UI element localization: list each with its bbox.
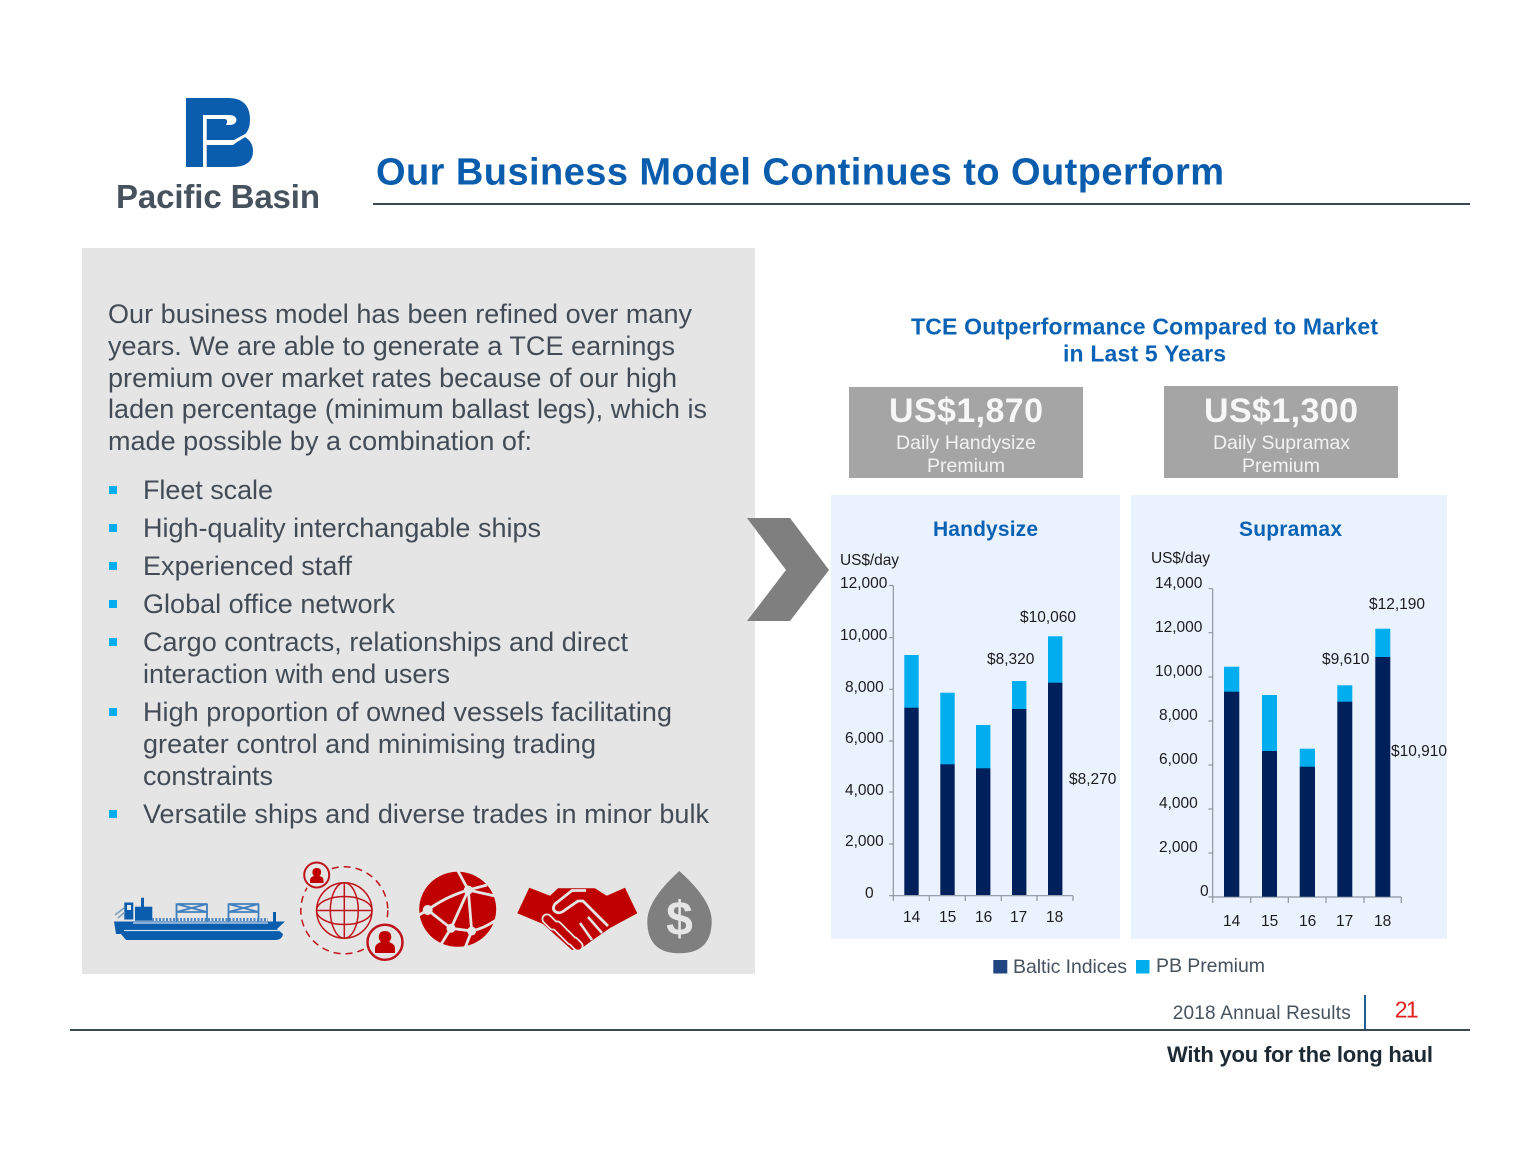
text block: introduction: premium over market rates because of our high	[108, 363, 677, 393]
value labels: Supramax: $9,610	[1322, 651, 1370, 668]
arrow: chevron	[747, 518, 829, 621]
axis labels: Supramax: 10,000	[1155, 663, 1203, 680]
bullet list: constraints	[143, 761, 273, 791]
text block: introduction	[108, 299, 707, 456]
axis labels: Handysize: 0	[865, 885, 874, 902]
logo: Pacific Basin: Pacific Basin	[116, 178, 320, 215]
axis labels: Handysize: 2,000	[845, 833, 884, 850]
heading: Supramax: Supramax	[1239, 518, 1342, 541]
heading: TCE outperformance: TCE Outperformance Compared to Market	[911, 314, 1378, 340]
text block: introduction: Our business model has been refined over many	[108, 299, 692, 329]
callout: Handysize premium: US$1,870	[889, 392, 1043, 430]
axis labels: Handysize: 18	[1046, 909, 1063, 926]
footer: 21	[1395, 997, 1419, 1023]
axis labels: Supramax: 8,000	[1159, 707, 1198, 724]
axis labels: Handysize: 8,000	[845, 679, 884, 696]
logo: Pacific Basin	[116, 98, 320, 215]
axis labels: Supramax: 14,000	[1155, 575, 1203, 592]
footer: With you for the long haul	[1167, 1042, 1433, 1067]
axis labels: Supramax: 18	[1374, 913, 1391, 930]
axis labels: Supramax: 15	[1261, 913, 1278, 930]
axis labels: Handysize: 14	[903, 909, 921, 926]
axis labels: Supramax: 14	[1223, 913, 1241, 930]
text block: introduction: made possible by a combination of:	[108, 426, 532, 456]
footer: 2018 Annual Results	[1173, 1003, 1351, 1024]
legend	[993, 955, 1265, 978]
bullet list: Global office network	[143, 589, 396, 619]
callout: Supramax premium: US$1,300	[1204, 392, 1358, 430]
bullet list: High proportion of owned vessels facilitating	[143, 697, 672, 727]
icon: dollar drop	[647, 871, 712, 953]
bullet list: Experienced staff	[143, 551, 352, 581]
text block: introduction: laden percentage (minimum ballast legs), which is	[108, 394, 707, 424]
title: Our Business Model Continues to Outperform	[376, 152, 1224, 194]
value labels: Handysize: $8,320	[987, 651, 1035, 668]
bullet list: Versatile ships and diverse trades in minor bulk	[143, 799, 710, 829]
callout: Supramax premium	[1164, 386, 1398, 478]
legend: PB Premium	[1156, 955, 1265, 977]
bullet list: High-quality interchangable ships	[143, 513, 541, 543]
callout: Handysize premium: Premium	[927, 455, 1005, 477]
callout: Handysize premium: Daily Handysize	[896, 432, 1036, 454]
axis labels: Handysize: 4,000	[845, 782, 884, 799]
axis labels: Supramax: US$/day	[1151, 550, 1210, 567]
axis labels: Handysize: 6,000	[845, 730, 884, 747]
value labels: Handysize	[987, 609, 1117, 788]
panel: Handysize chart	[831, 495, 1120, 939]
bullet list: greater control and minimising trading	[143, 729, 596, 759]
axis labels: Handysize: US$/day	[840, 552, 899, 569]
panel: Supramax chart	[1131, 495, 1447, 939]
icon: dollar drop: $	[666, 893, 693, 946]
heading: TCE outperformance: in Last 5 Years	[1063, 340, 1226, 366]
callout: Supramax premium: Premium	[1242, 455, 1320, 477]
bars: Supramax	[1224, 629, 1390, 897]
icon: ship	[114, 898, 285, 940]
icon: handshake	[517, 888, 637, 950]
bullet list	[109, 475, 710, 829]
axis labels: Supramax: 0	[1200, 883, 1209, 900]
bullet list: Cargo contracts, relationships and direct	[143, 627, 628, 657]
axis labels: Handysize: 12,000	[840, 575, 888, 592]
axis labels: Supramax	[1151, 550, 1391, 930]
heading: Handysize: Handysize	[933, 518, 1038, 541]
legend: Baltic Indices	[1013, 956, 1127, 978]
icon: globe with people	[301, 859, 406, 963]
axis labels: Handysize: 17	[1010, 909, 1027, 926]
bullet list: interaction with end users	[143, 659, 450, 689]
footer	[70, 995, 1470, 1067]
icon: network globe	[419, 871, 496, 948]
value labels: Supramax: $10,910	[1391, 743, 1447, 760]
axis labels: Supramax: 6,000	[1159, 751, 1198, 768]
axis labels: Supramax: 16	[1299, 913, 1316, 930]
callout: Handysize premium	[849, 387, 1083, 478]
axes: Handysize	[889, 586, 1073, 901]
axis labels: Supramax: 12,000	[1155, 619, 1203, 636]
axis labels: Handysize: 16	[975, 909, 992, 926]
value labels: Handysize: $10,060	[1020, 609, 1076, 626]
axis labels: Supramax: 2,000	[1159, 839, 1198, 856]
axis labels: Supramax: 4,000	[1159, 795, 1198, 812]
axis labels: Handysize: 10,000	[840, 627, 888, 644]
axis labels: Handysize: 15	[939, 909, 956, 926]
bars: Handysize	[904, 636, 1062, 895]
panel: business model	[82, 248, 755, 974]
value labels: Handysize: $8,270	[1069, 771, 1117, 788]
axes: Supramax	[1208, 589, 1401, 903]
bullet list: Fleet scale	[143, 475, 273, 505]
value labels: Supramax: $12,190	[1369, 596, 1425, 613]
text block: introduction: years. We are able to generate a TCE earnings	[108, 331, 675, 361]
heading: TCE outperformance	[911, 314, 1378, 366]
callout: Supramax premium: Daily Supramax	[1213, 432, 1350, 454]
value labels: Supramax	[1322, 596, 1447, 760]
axis labels: Supramax: 17	[1336, 913, 1353, 930]
axis labels: Handysize	[840, 552, 1063, 926]
